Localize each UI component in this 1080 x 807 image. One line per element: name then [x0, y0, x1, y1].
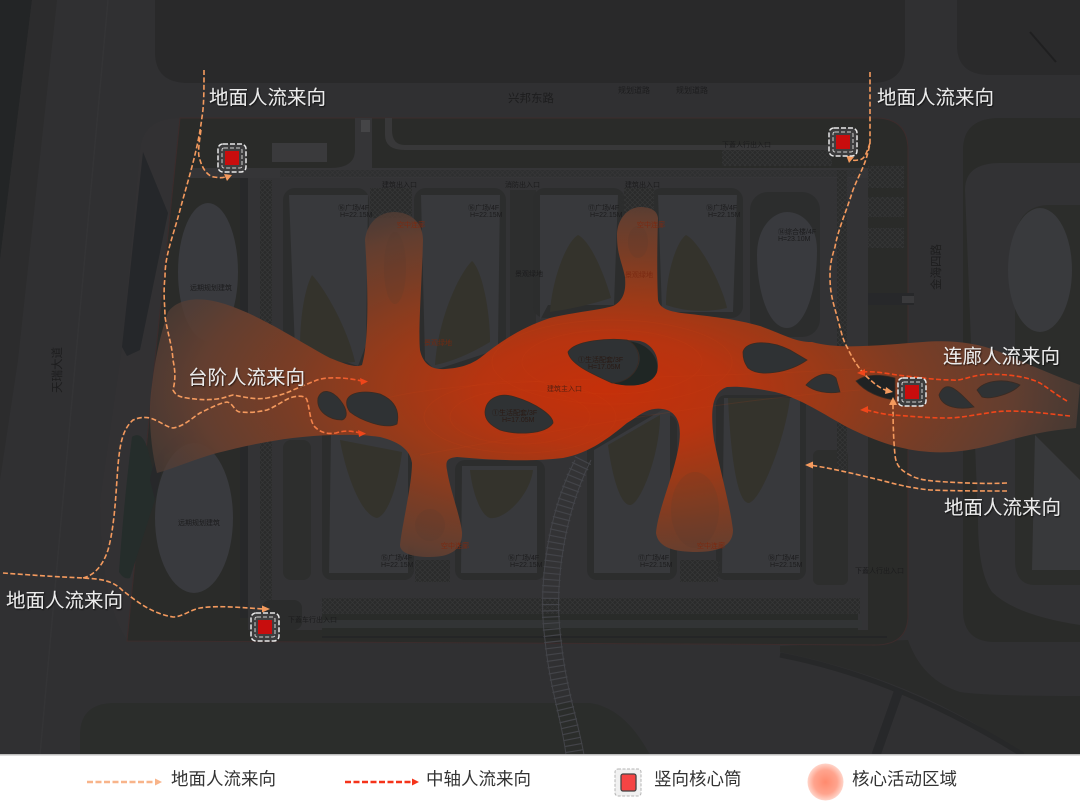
plan labels: H=22.15M — [381, 562, 414, 569]
zone labels: 空中连廊 — [697, 541, 725, 550]
zone labels: 空中连廊 — [441, 541, 469, 550]
plan labels: H=22.15M — [510, 562, 543, 569]
core activity zone — [150, 207, 1080, 557]
label: ground flow north-east: 地面人流来向 — [877, 87, 994, 109]
plan labels: H=22.15M — [590, 212, 623, 219]
building: south 1 — [329, 433, 408, 573]
compass — [1028, 32, 1060, 66]
legend: ground flow — [87, 769, 276, 789]
building: north 4 — [658, 195, 737, 312]
zone labels — [397, 220, 725, 550]
building: south 2 — [461, 466, 537, 573]
building: south 4 — [722, 398, 800, 573]
label: ground flow east: 地面人流来向 — [944, 497, 1061, 519]
label: stair flow: 台阶人流来向 — [188, 367, 305, 389]
label: ground flow north-west: 地面人流来向 — [209, 87, 326, 109]
plan labels: ⑯广场/4F — [468, 203, 499, 212]
plan labels: ⑯广场/4F — [508, 553, 539, 562]
plan labels: 远期规划建筑 — [190, 283, 232, 292]
plan labels: 远期规划建筑 — [178, 518, 220, 527]
plan labels: H=23.10M — [778, 236, 811, 243]
east block — [963, 118, 1080, 642]
building: north 2 — [421, 195, 500, 370]
dark interior holes — [612, 341, 658, 385]
bridge — [543, 460, 591, 755]
legend: axis flow: 中轴人流来向 — [426, 769, 531, 789]
building: south 3 — [594, 410, 670, 573]
ground flow: north-east — [830, 72, 889, 391]
legend: core activity area: 核心活动区域 — [852, 769, 957, 789]
core activity zone: ①生活配套/3F — [492, 408, 537, 417]
legend: ground flow: 地面人流来向 — [171, 769, 276, 789]
core tube: east — [898, 378, 926, 406]
red zone contours — [380, 320, 870, 455]
core tube: north-east — [829, 128, 857, 156]
legend: core tube — [615, 769, 742, 796]
plan labels: ⑰广场/4F — [588, 203, 619, 212]
planning buildings and courtyards — [289, 195, 800, 573]
legend: core tube: 竖向核心筒 — [654, 769, 742, 789]
site base — [100, 118, 908, 645]
plan labels: 消防出入口 — [505, 180, 540, 189]
road names: 兴邦东路 — [508, 91, 554, 105]
core activity zone: 建筑主入口 — [547, 384, 582, 393]
plan labels: H=22.15M — [770, 562, 803, 569]
plan labels: ⑮广场/4F — [381, 553, 412, 562]
zone labels: 空中连廊 — [637, 220, 665, 229]
legend: core activity area — [808, 764, 957, 800]
plan labels: ⑭综合楼/4F — [778, 227, 816, 236]
plan labels: H=22.15M — [340, 212, 373, 219]
ground flow: south-west branches — [3, 396, 360, 617]
lobe shades — [384, 226, 719, 548]
plan labels: ⑱广场/4F — [768, 553, 799, 562]
road names: 规划道路 — [676, 85, 708, 95]
core activity zone: H=17.05M — [502, 417, 535, 424]
road names: 金海四路 — [929, 244, 943, 290]
ground flow: north-west branches — [164, 70, 362, 400]
south-east corner — [780, 640, 1080, 755]
ground flow: east — [810, 401, 1007, 491]
road names — [50, 85, 943, 393]
plan labels: ⑱广场/4F — [706, 203, 737, 212]
plan labels: H=22.15M — [708, 212, 741, 219]
zone labels: 景观绿地 — [424, 338, 452, 347]
arrowheads — [224, 155, 897, 612]
road names: 规划道路 — [618, 85, 650, 95]
plan labels: ⑰广场/4F — [638, 553, 669, 562]
core activity zone: H=17.05M — [588, 364, 621, 371]
plan labels: H=22.15M — [640, 562, 673, 569]
building: north 1 — [289, 195, 368, 366]
core tube: north-west — [218, 144, 246, 172]
red zone shape — [150, 207, 1080, 557]
zone labels: 景观绿地 — [625, 270, 653, 279]
label: corridor flow: 连廊人流来向 — [943, 346, 1060, 368]
plan labels: 下蓋车行出入口 — [288, 615, 337, 624]
zone labels: 空中连廊 — [397, 220, 425, 229]
road names: 天瑞大道 — [50, 347, 64, 393]
ring road and courts — [240, 150, 914, 638]
plan labels: 景观绿地 — [515, 269, 543, 278]
south block — [80, 703, 650, 755]
core activity zone: ①生活配套/3F — [578, 355, 623, 364]
plan labels: 下蓋人行出入口 — [855, 566, 904, 575]
building: north 3 — [540, 195, 618, 320]
building ovals — [155, 203, 817, 593]
corridor flow — [863, 372, 1070, 418]
plan labels: 建筑出入口 — [625, 180, 660, 189]
legend panel — [0, 754, 1080, 807]
plan labels: ⑯广场/4F — [338, 203, 369, 212]
label: ground flow south-west: 地面人流来向 — [6, 590, 123, 612]
plan labels — [178, 140, 904, 624]
plan labels: 下蓋人行出入口 — [722, 140, 771, 149]
legend: axis flow — [345, 769, 531, 789]
core tube: south-west — [251, 613, 279, 641]
plan labels: H=22.15M — [470, 212, 503, 219]
plan labels: 建筑出入口 — [382, 180, 417, 189]
